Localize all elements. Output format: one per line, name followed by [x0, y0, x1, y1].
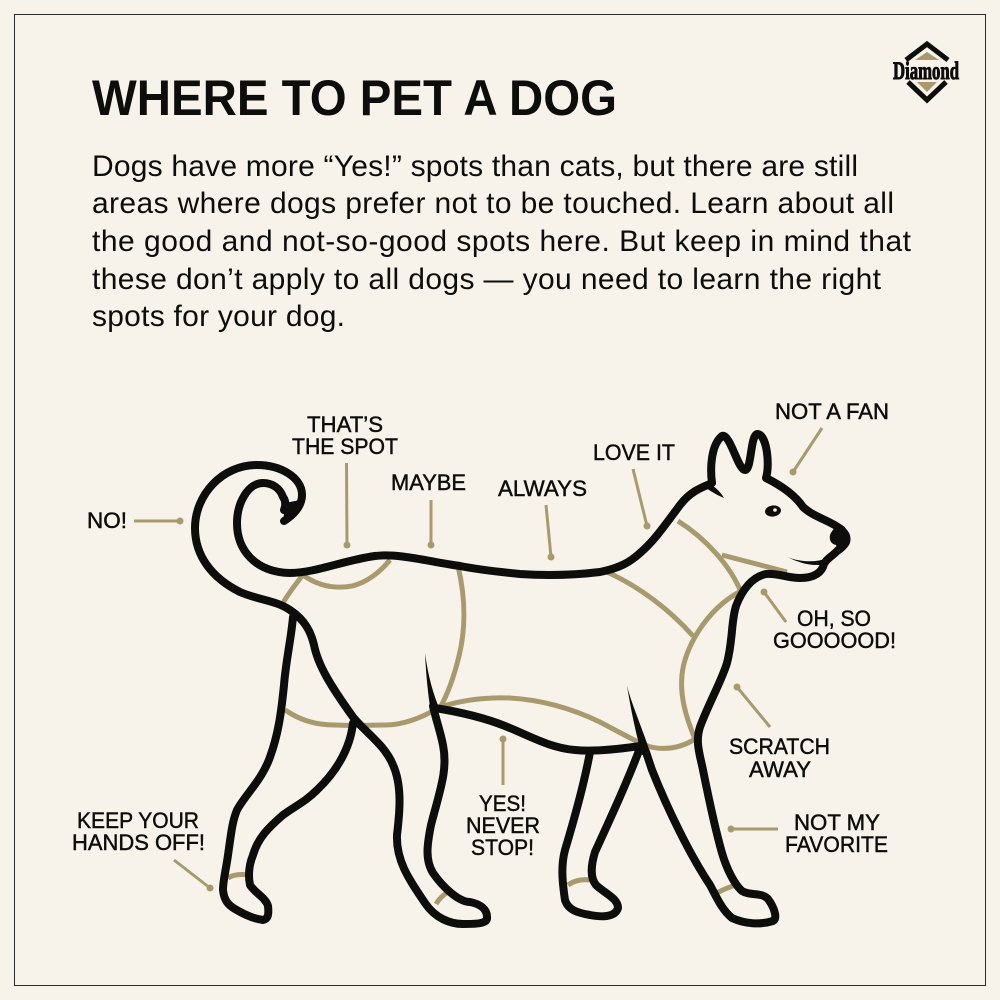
dog illustration [195, 434, 850, 924]
label: keep your hands off: KEEP YOUR [77, 808, 199, 833]
label: that's the spot [292, 412, 398, 548]
label: maybe [391, 470, 466, 548]
label: not a fan: NOT A FAN [775, 399, 889, 424]
nose [830, 524, 850, 559]
label: not my favorite: NOT MY [794, 810, 880, 835]
intro text block: these don’t apply to all dogs — you need to learn the right [92, 263, 882, 296]
icon: Diamond logo [893, 44, 959, 100]
intro text block: spots for your dog. [92, 300, 345, 333]
label: always [498, 476, 587, 560]
tan zone lines [228, 521, 787, 904]
label: oh, so goooood: GOOOOOD! [773, 628, 896, 653]
tail tip [283, 500, 300, 524]
label: oh, so goooood [760, 588, 896, 653]
label: love it: LOVE IT [593, 440, 675, 465]
label: always: ALWAYS [498, 476, 587, 501]
front near leg [562, 748, 640, 916]
label: that's the spot: THE SPOT [292, 434, 398, 459]
label: yes never stop: STOP! [471, 835, 534, 860]
label: scratch away: SCRATCH [729, 734, 830, 759]
chin, chest and front leg [646, 550, 838, 923]
tail outer and rear leg [195, 465, 487, 924]
intro text block: the good and not-so-good spots here. But keep in mind that [92, 225, 912, 258]
label: yes never stop [466, 736, 540, 860]
label: scratch away [729, 684, 830, 782]
label: yes never stop: YES! [479, 791, 526, 816]
intro text block [92, 150, 912, 333]
eye [764, 504, 782, 518]
label: scratch away: AWAY [749, 757, 811, 782]
label: oh, so goooood: OH, SO [797, 606, 871, 631]
label: keep your hands off: HANDS OFF! [72, 830, 205, 855]
intro text block: Dogs have more “Yes!” spots than cats, but there are still [92, 150, 858, 183]
near hind leg [223, 617, 353, 920]
label: that's the spot: THAT’S [307, 412, 383, 437]
tapered body spikes [425, 653, 441, 713]
label: not my favorite: FAVORITE [785, 832, 888, 857]
label: no: NO! [87, 508, 127, 533]
black outline [195, 434, 850, 924]
label: not my favorite [728, 810, 888, 857]
icon: Diamond logo: Diamond [893, 58, 959, 85]
label: yes never stop: NEVER [466, 813, 540, 838]
label: maybe: MAYBE [391, 470, 466, 495]
intro text block: areas where dogs prefer not to be touched. Learn about all [92, 187, 894, 220]
label: love it [593, 440, 675, 530]
belly [435, 708, 640, 751]
ears and muzzle top [711, 434, 842, 530]
mouth [787, 557, 828, 565]
ear inner spike [706, 483, 724, 498]
label: not a fan [775, 399, 889, 476]
back and inner tail [237, 483, 712, 575]
title: WHERE TO PET A DOG [92, 70, 617, 126]
label: keep your hands off [72, 808, 214, 892]
label: no [87, 508, 184, 533]
